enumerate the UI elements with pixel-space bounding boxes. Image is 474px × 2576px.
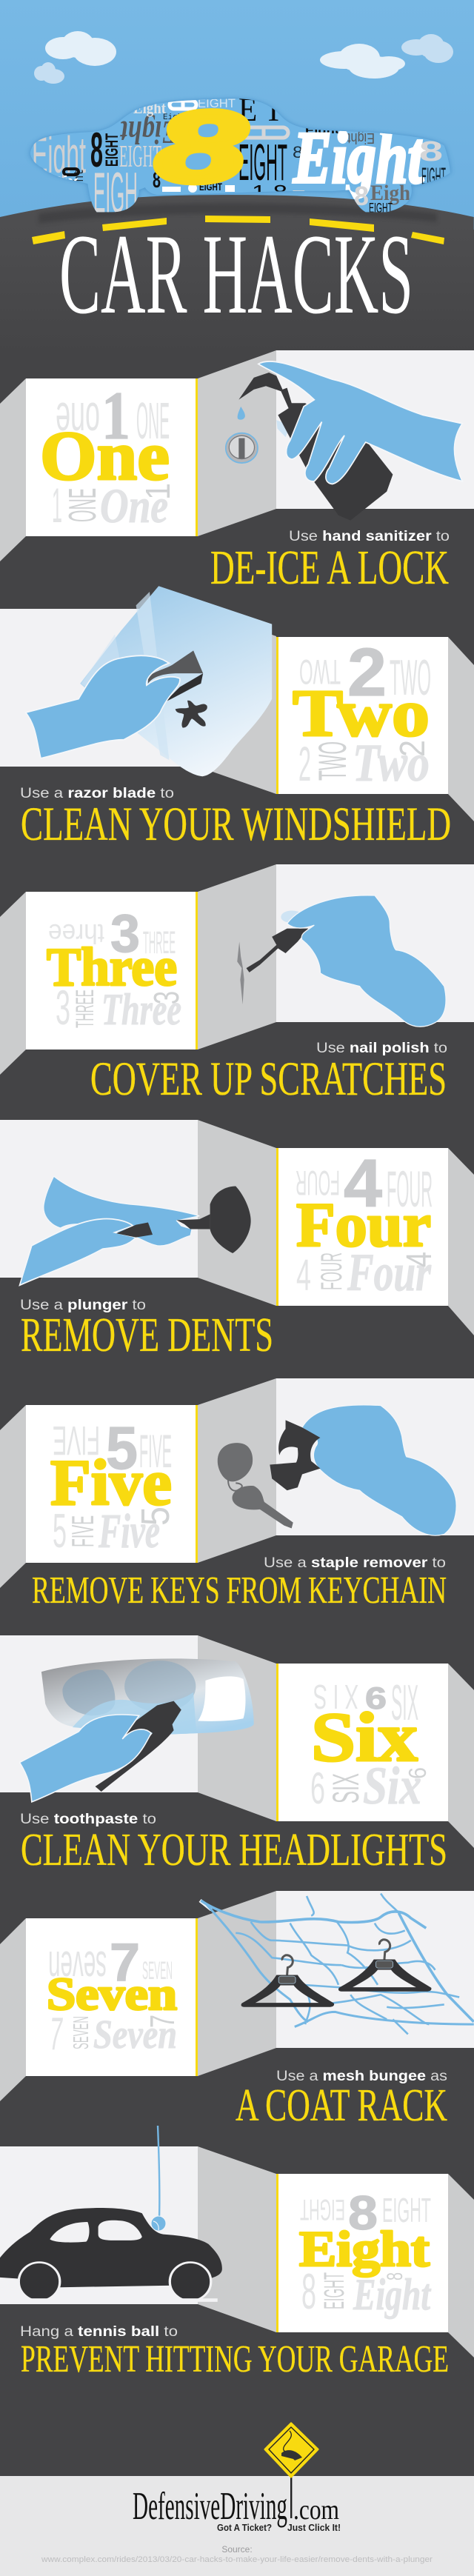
illustration: nail polish xyxy=(237,895,446,1027)
number words: 3 xyxy=(147,991,187,1004)
wall xyxy=(198,1120,276,1306)
illustration: tennis ball xyxy=(151,2216,166,2231)
number words: 5 xyxy=(133,1506,178,1526)
car made of the word eight: Eight xyxy=(133,99,167,117)
instruction text: Use a plunger to xyxy=(20,1298,146,1313)
illustration: toothpaste on headlight xyxy=(20,1658,254,1802)
yellow edge xyxy=(196,1405,198,1563)
logo tagline: Just Click It! xyxy=(287,2522,341,2533)
number words: EIGHT xyxy=(319,2272,350,2309)
yellow edge xyxy=(196,378,198,536)
number words: 1 xyxy=(52,478,62,533)
car made of the word eight: EIGHT xyxy=(369,201,393,216)
left wall xyxy=(0,1405,26,1588)
car made of the word eight: EIGHT xyxy=(198,96,236,110)
car made of the word eight: EIGHT xyxy=(238,133,287,191)
illustration: plunger xyxy=(20,1176,251,1285)
number words: Two xyxy=(293,677,430,750)
hanger left xyxy=(241,1955,334,2007)
wall xyxy=(198,1635,276,1821)
number words: 3 xyxy=(56,980,70,1035)
panel: hack four xyxy=(0,1120,474,1362)
number words xyxy=(310,1675,431,1815)
illustration: tennis ball string xyxy=(158,2126,159,2218)
car made of the word eight: 8 xyxy=(419,136,443,167)
number words: Eight xyxy=(299,2220,430,2277)
panel: hack three: THREE xyxy=(143,925,176,961)
car made of the word eight: Eight xyxy=(163,113,187,122)
number words: TWO xyxy=(311,741,355,781)
logo wordmark: DefensiveDriving xyxy=(133,2485,287,2528)
mesh net xyxy=(200,1894,474,2034)
number words: 6 xyxy=(310,1764,325,1813)
instruction text: Use nail polish to xyxy=(316,1041,447,1056)
number words: TWO xyxy=(299,653,341,692)
logo dot com: .com xyxy=(293,2495,339,2526)
source label: Source: xyxy=(221,2544,253,2555)
cloud large left xyxy=(45,31,116,66)
footer panel xyxy=(0,2423,474,2576)
number words: 5 xyxy=(53,1504,67,1558)
number words: One xyxy=(100,479,168,533)
light panel xyxy=(276,1891,474,2048)
left wall xyxy=(0,378,26,561)
number words: 2 xyxy=(347,635,387,710)
car made of the word eight: 8 xyxy=(293,143,303,161)
white number card xyxy=(278,1148,448,1306)
car made of the word eight: Eight xyxy=(293,116,425,198)
number words: 5 xyxy=(106,1415,138,1482)
yellow edge xyxy=(276,2174,278,2332)
number words: Three xyxy=(47,937,177,997)
light panel xyxy=(276,864,474,1022)
number words: 2 xyxy=(393,740,433,757)
number words: 4 xyxy=(400,1252,439,1267)
left wall xyxy=(0,892,26,1075)
number words: 4 xyxy=(296,1251,311,1300)
number words xyxy=(47,904,187,1035)
panel: hack two xyxy=(0,586,474,851)
number words: EIGHT xyxy=(300,2193,345,2226)
car made of the word eight: EIGHT xyxy=(119,140,161,174)
number words: 7 xyxy=(110,1933,140,1992)
light panel xyxy=(276,350,474,509)
illustration: mesh bungee and coat hangers xyxy=(200,1894,474,2034)
number words: 7 xyxy=(143,2015,181,2028)
number words: ONE xyxy=(61,488,104,522)
right wall xyxy=(448,2174,474,2358)
road dashes xyxy=(32,216,444,244)
number words xyxy=(296,1147,439,1302)
car made of the word eight: EIGHT xyxy=(199,181,222,193)
number words: 3 xyxy=(110,904,140,964)
yellow edge xyxy=(196,1918,198,2076)
number words: FIVE xyxy=(65,1515,100,1547)
number words: SIX xyxy=(325,1773,367,1803)
panel: hack eight xyxy=(0,2126,474,2380)
right wall xyxy=(448,1664,474,1848)
panel: hack seven xyxy=(0,1891,474,2131)
white number card xyxy=(278,637,448,794)
cloud large right xyxy=(320,44,405,79)
number words xyxy=(40,378,177,533)
car made of the word eight xyxy=(30,99,450,212)
number words: FIVE xyxy=(53,1418,100,1464)
number words: 2 xyxy=(298,736,311,791)
panel: hack four: FOUR xyxy=(296,1164,340,1203)
light panel xyxy=(0,609,198,767)
number words: 7 xyxy=(50,2009,63,2060)
yellow edge xyxy=(276,1148,278,1306)
car made of the word eight: 8 xyxy=(90,122,103,177)
car made of the word eight: Eight xyxy=(224,159,232,179)
number words: 6 xyxy=(404,1767,431,1779)
number words: 8 xyxy=(301,2263,316,2320)
number words: Six xyxy=(363,1756,421,1815)
road shadow under car xyxy=(39,203,437,224)
number words: Five xyxy=(98,1504,160,1558)
panel: hack five xyxy=(0,1378,474,1612)
number words: Eight xyxy=(353,2270,432,2319)
number words: Four xyxy=(347,1243,432,1302)
car made of the word eight: 8 xyxy=(354,181,369,211)
number words: 8 xyxy=(383,2272,407,2280)
instruction text: Use hand sanitizer to xyxy=(289,529,450,544)
instruction text: Use toothpaste to xyxy=(20,1812,156,1827)
number words: Five xyxy=(50,1447,172,1519)
car made of the word eight: 8 xyxy=(153,168,161,193)
left wall xyxy=(0,1918,26,2101)
panel: hack six: SIX xyxy=(391,1675,418,1731)
number words xyxy=(293,635,433,793)
right wall xyxy=(448,1148,474,1335)
number words: one xyxy=(56,392,100,450)
number words: 6 xyxy=(365,1681,387,1715)
logo tagline xyxy=(217,2522,341,2533)
logo tagline: Got A Ticket? xyxy=(217,2522,272,2533)
yellow edge xyxy=(276,1664,278,1821)
number words: FOUR xyxy=(316,1252,348,1290)
panel: hack three xyxy=(0,864,474,1106)
car made of the word eight: Eight xyxy=(347,130,375,146)
panel: hack seven: SEVEN xyxy=(142,1957,173,1985)
logo sign xyxy=(265,2423,318,2477)
hanger right xyxy=(338,1940,431,1992)
number words: Two xyxy=(353,733,430,793)
illustration: car xyxy=(0,2208,222,2302)
panel: hack five: FIVE xyxy=(139,1426,172,1478)
header: sky and clouds xyxy=(0,0,474,230)
right wall xyxy=(198,1378,276,1563)
car made of the word eight: E T xyxy=(238,90,283,128)
car made of the word eight: Eight xyxy=(120,114,179,150)
yellow edge xyxy=(196,892,198,1050)
wall xyxy=(198,2146,276,2332)
number words xyxy=(50,1415,178,1558)
cloud small left xyxy=(34,62,64,84)
light panel xyxy=(0,1635,198,1792)
number words: Seven xyxy=(47,1969,177,2020)
number words: SEVEN xyxy=(70,2016,93,2049)
right wall xyxy=(198,1891,276,2076)
panel: hack one: ONE xyxy=(136,392,170,450)
car made of the word eight: Six xyxy=(50,174,79,190)
number words: One xyxy=(40,418,170,495)
number words: three xyxy=(48,918,104,949)
source url: www.complex.com/rides/2013/03/20-car-hacks-to-make-your-life-easier/remove-dents-with-a-plunger xyxy=(41,2555,433,2564)
number words: Seven xyxy=(93,2012,177,2057)
car made of the word eight: E xyxy=(291,189,306,201)
number words: Three xyxy=(101,985,181,1034)
car glow shadow xyxy=(30,99,450,212)
wall xyxy=(198,609,276,794)
white number card xyxy=(26,1405,196,1563)
panel: hack one xyxy=(0,350,474,595)
car made of the word eight: 8 xyxy=(156,90,247,203)
white number card xyxy=(278,2174,448,2332)
light panel xyxy=(276,1378,474,1535)
number words: Six xyxy=(311,1699,418,1776)
number words xyxy=(299,2186,432,2320)
right wall xyxy=(448,637,474,821)
number words: 1 xyxy=(101,378,130,453)
instruction text: Hang a tennis ball to xyxy=(20,2324,178,2340)
number words: Four xyxy=(296,1190,431,1260)
light panel xyxy=(0,2146,198,2304)
number words: X I S xyxy=(313,1678,358,1716)
instruction text: Use a staple remover to xyxy=(264,1555,446,1571)
white number card xyxy=(26,378,196,536)
road xyxy=(0,195,474,356)
instruction text: Use a mesh bungee as xyxy=(276,2069,447,2084)
illustration: razor on windshield xyxy=(26,586,272,776)
right wall xyxy=(198,864,276,1050)
number words: 8 xyxy=(348,2186,378,2240)
car made of the word eight: Eigh xyxy=(370,181,410,205)
right wall xyxy=(198,350,276,536)
white number card xyxy=(26,1918,196,2076)
number words: 4 xyxy=(344,1147,382,1221)
light panel xyxy=(0,1120,198,1278)
logo sign pole xyxy=(290,2474,292,2518)
heading: REMOVE DENTS xyxy=(21,1308,273,1362)
illustration: hand sanitizer and lock xyxy=(226,361,462,521)
car made of the word eight: Eight xyxy=(32,126,86,184)
car made of the word eight: Eight xyxy=(73,169,87,201)
car made of the word eight: EIGHT xyxy=(102,133,122,167)
number words: 1 xyxy=(138,483,177,500)
yellow edge xyxy=(276,637,278,794)
car made of the word eight: EIGH xyxy=(93,160,138,225)
car made of the word eight: 1 8 xyxy=(252,181,287,203)
cloud small right xyxy=(401,34,453,63)
white number card xyxy=(26,892,196,1050)
number words xyxy=(47,1933,181,2060)
car made of the word eight: Eight xyxy=(305,127,340,136)
instruction text: Use a razor blade to xyxy=(20,786,174,801)
panel: hack six xyxy=(0,1635,474,1875)
illustration: staple remover and keys xyxy=(218,1405,456,1535)
white number card xyxy=(278,1664,448,1821)
number words: THREE xyxy=(71,990,99,1028)
